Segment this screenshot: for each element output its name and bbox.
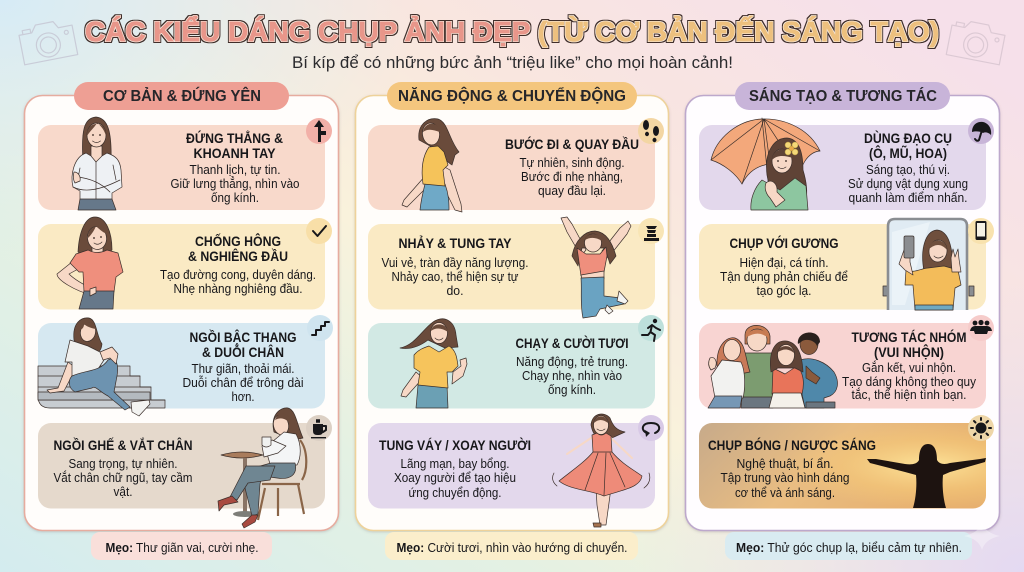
- icon: phone: [968, 218, 994, 244]
- illustration: woman with umbrella: [711, 118, 820, 210]
- icon: posture arrow: [306, 118, 332, 144]
- text: chụp với gương: tạo góc lạ.: [756, 283, 812, 298]
- text: đứng thẳng: Giữ lưng thẳng, nhìn vào: [170, 176, 300, 191]
- text: chạy: [516, 336, 628, 397]
- text: tung váy: [379, 438, 531, 500]
- icon: sun: [968, 415, 994, 441]
- text: chạy: Chạy nhẹ, nhìn vào: [522, 368, 622, 383]
- text: dùng đạo cụ: [848, 131, 968, 205]
- card: chụp với gương: [699, 218, 994, 310]
- text: bước đi: Bước đi nhẹ nhàng,: [521, 169, 623, 184]
- text: tung váy: TUNG VÁY / XOAY NGƯỜI: [379, 438, 531, 453]
- illustration: woman running: [400, 319, 467, 408]
- pill heading: cơ bản: [74, 82, 289, 110]
- illustration: woman walking: [402, 119, 462, 212]
- illustration: woman twirling dress: [553, 414, 650, 527]
- illustration: group of friends: [708, 325, 837, 408]
- icon: stairs: [307, 315, 333, 341]
- text: ngồi ghế: Vắt chân chữ ngũ, tay cầm: [54, 470, 192, 485]
- text: chống hông: Tạo đường cong, duyên dáng.: [160, 267, 316, 282]
- text: ngồi bậc thang: & DUỖI CHÂN: [202, 345, 284, 360]
- text: ngồi bậc thang: [182, 330, 304, 404]
- text: đứng thẳng: ĐỨNG THẲNG &: [186, 131, 283, 146]
- text: ngồi ghế: Sang trọng, tự nhiên.: [68, 456, 178, 471]
- tip: năng động: Mẹo: Cười tươi, nhìn vào hướng di chuyển.: [396, 540, 628, 555]
- text: bước đi: [505, 137, 639, 198]
- text: đứng thẳng: ống kính.: [211, 190, 259, 205]
- icon: footprints: [638, 118, 664, 144]
- card: đứng thẳng & khoanh tay: [38, 117, 332, 210]
- text: chụp với gương: Hiện đại, cá tính.: [740, 255, 828, 270]
- icon: people group: [968, 315, 994, 341]
- text: ngồi bậc thang: NGỒI BẬC THANG: [190, 330, 296, 345]
- text: chạy: CHẠY & CƯỜI TƯƠI: [516, 336, 628, 351]
- text: ngồi ghế: NGỒI GHẾ & VẮT CHÂN: [54, 438, 192, 453]
- illustration: silhouette with open arms: [867, 444, 986, 508]
- text: chụp bóng: [708, 438, 876, 500]
- pill heading: sáng tạo: [735, 82, 950, 110]
- text: tương tác nhóm: Gắn kết, vui nhộn.: [862, 360, 956, 375]
- text: đứng thẳng: KHOANH TAY: [194, 146, 276, 161]
- icon: jump spring: [638, 218, 664, 244]
- pill heading: sáng tạo: SÁNG TẠO & TƯƠNG TÁC: [749, 88, 937, 105]
- text: chụp bóng: CHỤP BÓNG / NGƯỢC SÁNG: [708, 438, 876, 453]
- text: nhảy: [382, 236, 528, 298]
- text: ngồi bậc thang: hơn.: [232, 389, 254, 404]
- pill heading: cơ bản: CƠ BẢN & ĐỨNG YÊN: [103, 87, 261, 105]
- text: dùng đạo cụ: (Ô, MŨ, HOA): [869, 146, 947, 161]
- icon: coffee cup: [306, 415, 332, 441]
- card: ngồi bậc thang & duỗi chân: [38, 315, 333, 416]
- icon: check mark: [306, 218, 332, 244]
- text: tương tác nhóm: [842, 330, 977, 402]
- card: tung váy / xoay người: [368, 414, 664, 527]
- text: chụp với gương: CHỤP VỚI GƯƠNG: [730, 236, 838, 251]
- card: nhảy & tung tay: [368, 217, 664, 318]
- card: chống hông & nghiêng đầu: [38, 217, 332, 310]
- text: tương tác nhóm: tắc, thể hiện tình bạn.: [852, 387, 966, 402]
- illustration: woman jumping: [561, 217, 631, 318]
- icon: faint camera right: [946, 18, 1006, 65]
- tip: sáng tạo: Mẹo: Thử góc chụp lạ, biểu cảm tự nhiên.: [736, 540, 962, 555]
- text: tương tác nhóm: Tạo dáng không theo quy: [842, 374, 977, 389]
- illustration: woman arms crossed: [72, 117, 122, 210]
- illustration: mirror selfie: [883, 219, 974, 310]
- tip: cơ bản: [91, 532, 272, 560]
- text: chống hông: [160, 234, 316, 296]
- text: bước đi: Tự nhiên, sinh động.: [520, 155, 624, 170]
- text: chụp bóng: Tập trung vào hình dáng: [720, 470, 850, 485]
- illustration: woman hand on hip: [57, 217, 123, 309]
- icon: faint camera left: [18, 18, 78, 65]
- text: chụp bóng: Nghệ thuật, bí ẩn.: [736, 456, 834, 471]
- panel: sáng tạo & tương tác: [686, 82, 1000, 530]
- text: bước đi: BƯỚC ĐI & QUAY ĐẦU: [505, 137, 639, 152]
- subtitle: Bí kíp để có những bức ảnh “triệu like” cho mọi hoàn cảnh!: [292, 54, 733, 72]
- icon: sparkle: [964, 522, 1000, 550]
- text: chụp bóng: cơ thể và ánh sáng.: [735, 485, 835, 500]
- text: tung váy: Lãng mạn, bay bổng.: [400, 456, 510, 471]
- text: ngồi bậc thang: Duỗi chân để trông dài: [182, 375, 304, 390]
- text: dùng đạo cụ: DÙNG ĐẠO CỤ: [864, 131, 952, 146]
- card: tương tác nhóm: [699, 315, 994, 408]
- card: ngồi ghế & vắt chân: [38, 408, 332, 528]
- tip: cơ bản: Mẹo: Thư giãn vai, cười nhẹ.: [106, 540, 258, 555]
- illustration: woman sitting on stairs: [38, 318, 165, 416]
- text: nhảy: Nhảy cao, thể hiện sự tự: [392, 269, 519, 284]
- panel: cơ bản & đứng yên: [24, 82, 338, 530]
- text: chạy: ống kính.: [548, 382, 596, 397]
- illustration: woman sitting in cafe: [218, 408, 306, 528]
- tip: sáng tạo: [725, 532, 972, 560]
- card: bước đi & quay đầu: [368, 118, 664, 212]
- text: chạy: Năng động, trẻ trung.: [516, 354, 628, 369]
- pill heading: năng động: NĂNG ĐỘNG & CHUYỂN ĐỘNG: [398, 87, 626, 105]
- text: ngồi ghế: vật.: [114, 484, 132, 499]
- icon: rotate arrow: [638, 415, 664, 441]
- text: đứng thẳng: Thanh lịch, tự tin.: [190, 162, 280, 177]
- text: chống hông: & NGHIÊNG ĐẦU: [188, 249, 288, 264]
- text: ngồi bậc thang: Thư giãn, thoải mái.: [192, 361, 294, 376]
- text: tương tác nhóm: TƯƠNG TÁC NHÓM: [852, 330, 966, 345]
- tip: năng động: [385, 532, 638, 560]
- pill heading: năng động: [387, 82, 637, 110]
- text: tung váy: Xoay người để tạo hiệu: [394, 470, 516, 485]
- icon: runner: [638, 315, 664, 341]
- card: chạy & cười tươi: [368, 315, 664, 408]
- text: chống hông: CHỐNG HÔNG: [195, 234, 281, 249]
- icon: umbrella: [968, 118, 994, 144]
- text: dùng đạo cụ: Sáng tạo, thú vị.: [866, 162, 950, 177]
- text: tương tác nhóm: (VUI NHỘN): [874, 345, 944, 360]
- title: CÁC KIỂU DÁNG CHỤP ẢNH ĐẸP (TỪ CƠ BẢN ĐẾN SÁNG TẠO): [85, 15, 939, 47]
- text: dùng đạo cụ: Sử dụng vật dụng xung: [848, 176, 968, 191]
- text: chụp với gương: Tận dụng phản chiếu để: [720, 269, 848, 284]
- text: nhảy: Vui vẻ, tràn đầy năng lượng.: [382, 255, 528, 270]
- text: ngồi ghế: [54, 438, 192, 499]
- text: đứng thẳng: [170, 131, 300, 205]
- text: chụp với gương: [720, 236, 848, 298]
- text: bước đi: quay đầu lại.: [538, 183, 606, 198]
- text: dùng đạo cụ: quanh làm điểm nhấn.: [848, 190, 968, 205]
- text: nhảy: do.: [446, 283, 464, 298]
- text: chống hông: Nhẹ nhàng nghiêng đầu.: [174, 281, 302, 296]
- card: chụp bóng / ngược sáng: [699, 415, 994, 508]
- text: nhảy: NHẢY & TUNG TAY: [398, 236, 512, 251]
- text: tung váy: ứng chuyển động.: [408, 485, 502, 500]
- card: dùng đạo cụ: [699, 118, 994, 210]
- panel: năng động & chuyển động: [356, 82, 668, 530]
